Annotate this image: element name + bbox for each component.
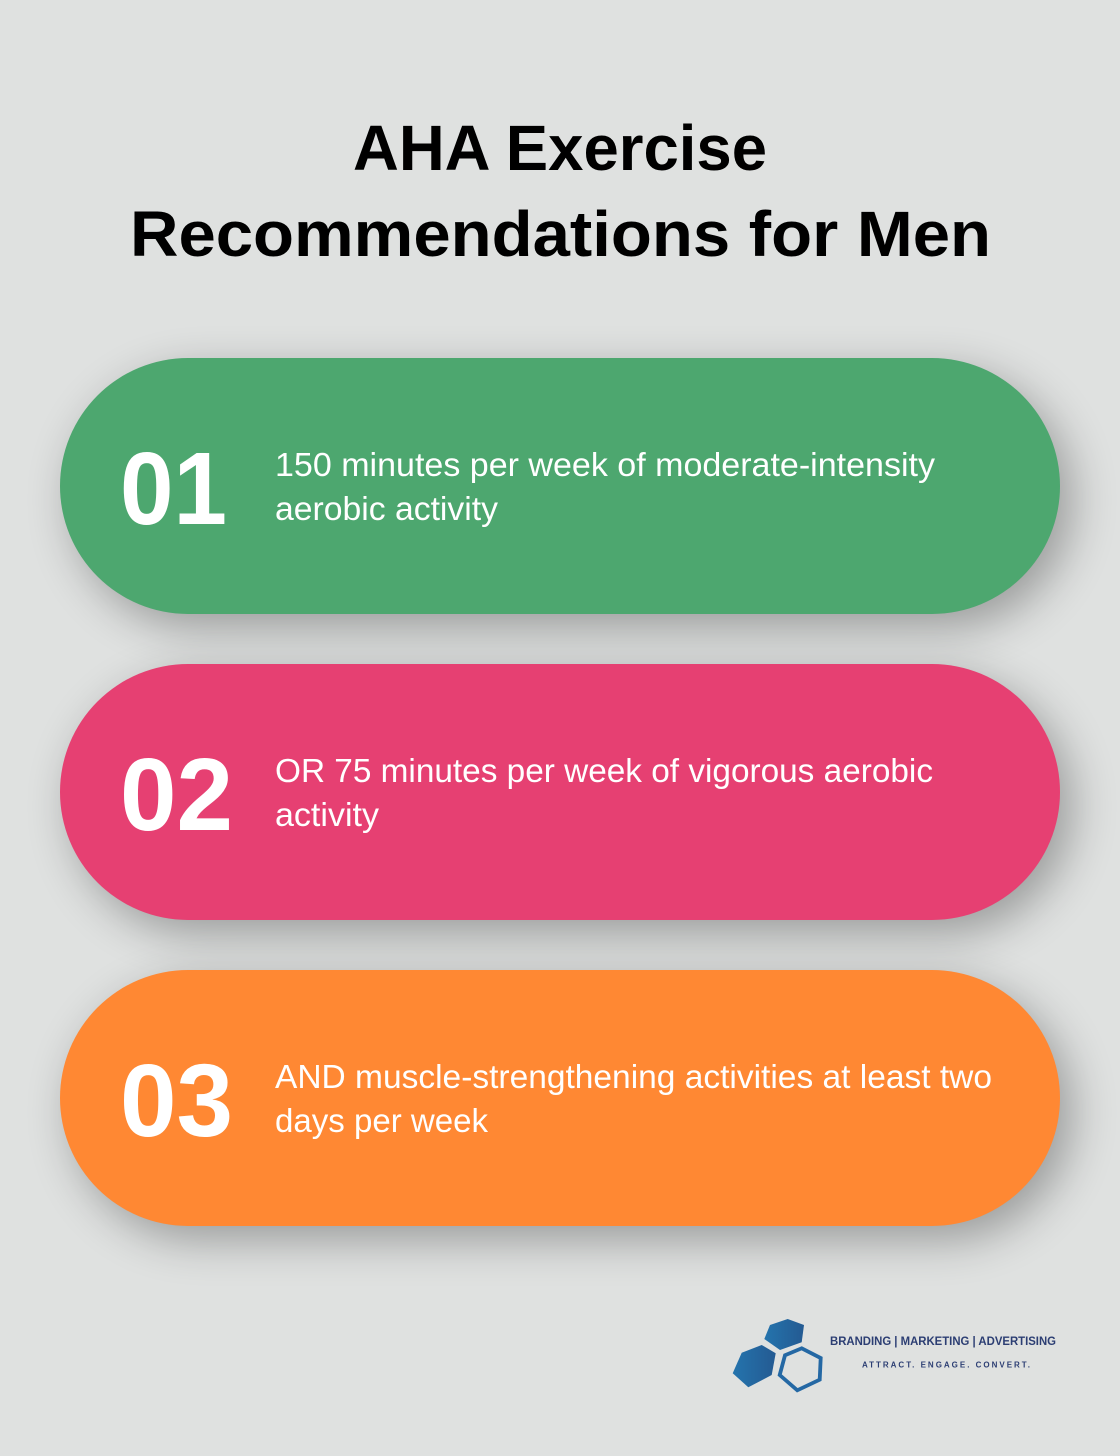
text: step 01 description: aerobic activity [275, 491, 498, 528]
logo tagline bottom: ATTRACT. ENGAGE. CONVERT. [862, 1360, 1030, 1370]
title: Recommendations for Men [130, 198, 991, 270]
icon: left solid hexagon [733, 1345, 776, 1387]
text: step 02 description: OR 75 minutes per week of vigorous aerobic [275, 753, 933, 790]
panel: step 03 [60, 970, 1060, 1226]
logo tagline top: BRANDING | MARKETING | ADVERTISING [830, 1334, 1056, 1348]
number 02: 02 [120, 737, 233, 852]
logo [732, 1319, 1056, 1392]
text: step 02 description [275, 753, 933, 834]
title: AHA Exercise [353, 112, 767, 184]
text: step 01 description [275, 447, 935, 528]
icon: outlined hexagon [780, 1348, 821, 1390]
text: step 03 description [275, 1059, 992, 1140]
panel: step 01 [60, 358, 1060, 614]
number 01: 01 [120, 431, 227, 546]
text: step 03 description: AND muscle-strengthening activities at least two [275, 1059, 992, 1096]
panel: step 02 [60, 664, 1060, 920]
icon: top solid hexagon [764, 1319, 804, 1350]
text: step 03 description: days per week [275, 1103, 488, 1140]
text: step 02 description: activity [275, 797, 379, 834]
number 03: 03 [120, 1043, 233, 1158]
title [130, 112, 991, 270]
text: step 01 description: 150 minutes per week of moderate-intensity [275, 447, 935, 484]
